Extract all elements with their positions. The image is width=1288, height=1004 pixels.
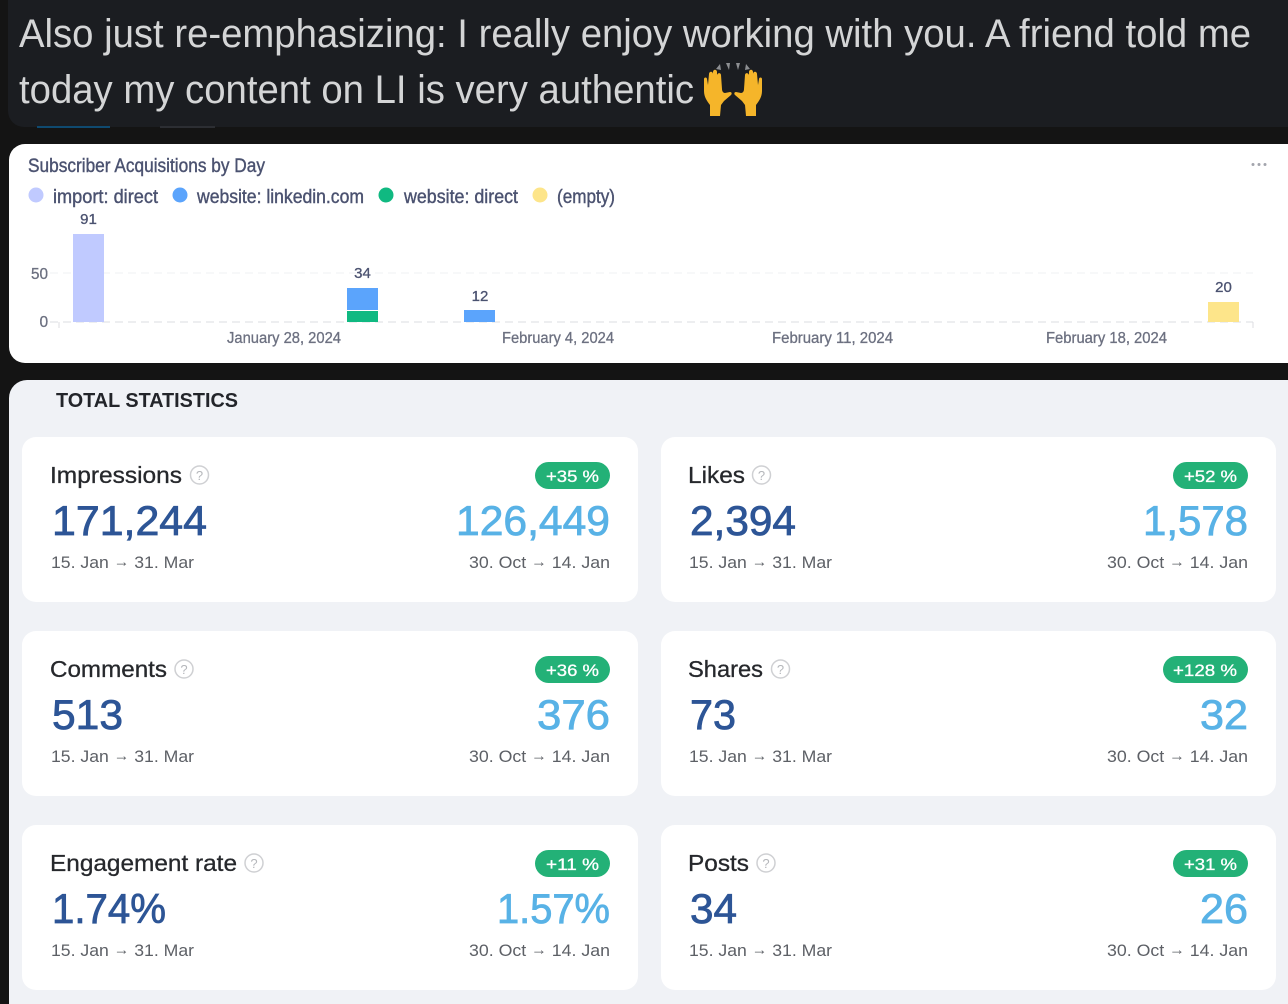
card: shares: → — [1169, 748, 1185, 764]
card: likes: 2,394 — [690, 497, 796, 544]
card: shares: 15. Jan — [689, 747, 745, 766]
card: impressions: 31. Mar — [129, 553, 194, 572]
card: likes: → — [752, 554, 767, 570]
chat text — [19, 12, 1251, 112]
card: posts: ? — [762, 856, 770, 871]
card: comments: +36 % — [546, 662, 599, 680]
card: engagement rate: 1.57% — [497, 885, 610, 932]
legend: website: direct — [403, 187, 519, 208]
panel: total statistics — [9, 380, 1288, 1004]
icon: more menu — [1252, 163, 1266, 166]
card: likes: Likes — [688, 462, 745, 488]
card: likes: 30. Oct — [1107, 553, 1162, 572]
card: likes: 14. Jan — [1185, 553, 1248, 572]
card: impressions: → — [531, 554, 547, 570]
card: shares: 14. Jan — [1185, 747, 1248, 766]
legend: import: direct — [53, 187, 159, 208]
card: impressions: → — [114, 554, 129, 570]
card: comments: → — [531, 748, 547, 764]
card: impressions: ? — [196, 468, 203, 483]
card: engagement rate: ? — [250, 856, 258, 871]
card: posts: 15. Jan — [689, 941, 745, 960]
card: comments: 31. Mar — [129, 747, 194, 766]
legend: website: linkedin.com — [196, 187, 364, 208]
card: comments: 513 — [52, 691, 123, 738]
card: impressions: 171,244 — [52, 497, 207, 544]
card: posts — [661, 825, 1276, 990]
card: comments: → — [114, 748, 129, 764]
card: engagement rate: 30. Oct — [469, 941, 524, 960]
card: likes: +52 % — [1184, 468, 1237, 486]
card: engagement rate — [22, 825, 638, 990]
card: comments: 376 — [537, 691, 610, 738]
bar chart: February 11, 2024 — [772, 330, 893, 347]
card: likes: → — [1169, 554, 1185, 570]
card: likes — [661, 437, 1276, 602]
card: impressions: +35 % — [546, 468, 599, 486]
card: comments — [22, 631, 638, 796]
card: engagement rate: +11 % — [546, 856, 599, 874]
card: shares: 30. Oct — [1107, 747, 1162, 766]
card: likes: 15. Jan — [689, 553, 745, 572]
card: posts: 34 — [690, 885, 737, 932]
card: likes: 1,578 — [1143, 497, 1248, 544]
card: shares: → — [752, 748, 767, 764]
section heading: TOTAL STATISTICS — [56, 390, 238, 412]
card: posts: +31 % — [1184, 856, 1237, 874]
card: comments: ? — [180, 662, 188, 677]
card: impressions: 15. Jan — [51, 553, 107, 572]
card: shares: 32 — [1200, 691, 1248, 738]
card: comments: 30. Oct — [469, 747, 524, 766]
card: shares: ? — [777, 662, 784, 677]
legend: (empty) — [557, 187, 615, 208]
bar chart — [31, 211, 1253, 347]
card: posts: → — [1169, 942, 1185, 958]
card: comments: 15. Jan — [51, 747, 107, 766]
chat text: today my content on LI is very authentic — [19, 68, 694, 112]
card: likes: ? — [758, 468, 765, 483]
bar chart: 12 — [472, 288, 488, 305]
card: impressions: Impressions — [50, 462, 182, 488]
panel: subscriber acquisitions chart — [9, 144, 1288, 363]
card: shares: 73 — [690, 691, 736, 738]
card: posts: 30. Oct — [1107, 941, 1162, 960]
bar chart: February 4, 2024 — [502, 330, 614, 347]
bar chart: 34 — [354, 265, 371, 282]
bar chart: 20 — [1215, 279, 1232, 296]
card: posts: Posts — [688, 850, 749, 876]
card: engagement rate: 31. Mar — [129, 941, 194, 960]
card: impressions: 126,449 — [456, 497, 610, 544]
card: engagement rate: → — [114, 942, 129, 958]
bar chart: 0 — [40, 314, 48, 331]
card: impressions — [22, 437, 638, 602]
card: comments: 14. Jan — [547, 747, 610, 766]
card: impressions: 30. Oct — [469, 553, 524, 572]
chat text: Also just re-emphasizing: I really enjoy working with you. A friend told me — [19, 12, 1251, 56]
card: shares: 31. Mar — [767, 747, 832, 766]
card: posts: 31. Mar — [767, 941, 832, 960]
card: engagement rate: Engagement rate — [50, 850, 237, 876]
card: shares — [661, 631, 1276, 796]
card: posts: 26 — [1200, 885, 1248, 932]
card: posts: 14. Jan — [1185, 941, 1248, 960]
card: engagement rate: 15. Jan — [51, 941, 107, 960]
panel: chat message — [8, 0, 1288, 128]
card: shares: Shares — [688, 656, 763, 682]
card: engagement rate: 14. Jan — [547, 941, 610, 960]
bar chart: February 18, 2024 — [1046, 330, 1167, 347]
card: likes: 31. Mar — [767, 553, 832, 572]
chart title: Subscriber Acquisitions by Day — [28, 156, 265, 177]
bar chart: 50 — [31, 266, 48, 283]
card: posts: → — [752, 942, 767, 958]
legend — [28, 187, 615, 208]
card: engagement rate: 1.74% — [52, 885, 166, 932]
card: shares: +128 % — [1173, 662, 1237, 680]
card: comments: Comments — [50, 656, 167, 682]
card: impressions: 14. Jan — [547, 553, 610, 572]
card: engagement rate: → — [531, 942, 547, 958]
icon: raised hands emoji — [704, 63, 762, 116]
bar chart: 91 — [80, 211, 97, 228]
bar chart: January 28, 2024 — [227, 330, 341, 347]
